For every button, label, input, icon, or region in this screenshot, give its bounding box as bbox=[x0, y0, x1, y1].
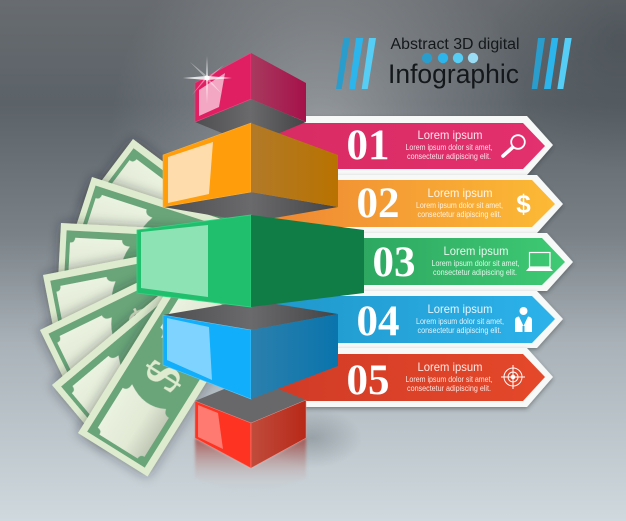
banknote 7 with dollar sign: $ bbox=[132, 350, 193, 400]
banner 1: Lorem ipsum bbox=[418, 128, 483, 142]
banknote 5 bbox=[40, 245, 251, 404]
banknote 6: $ bbox=[123, 327, 178, 385]
banner 3: Lorem ipsum dolor sit amet, bbox=[432, 259, 520, 268]
banner 3: 03 bbox=[372, 239, 416, 286]
blue box bbox=[163, 300, 338, 399]
banner 5: Lorem ipsum dolor sit amet, bbox=[406, 375, 492, 384]
banner 2: Lorem ipsum dolor sit amet, bbox=[416, 201, 503, 210]
title block bbox=[336, 36, 572, 89]
banknote 4 bbox=[43, 238, 250, 355]
pink box bbox=[195, 53, 306, 145]
sparkle bbox=[183, 56, 232, 104]
banner 5: 05 bbox=[346, 357, 390, 404]
banner 3: Lorem ipsum bbox=[444, 244, 509, 258]
banknote 3 bbox=[57, 223, 256, 315]
banner 4: 04 bbox=[356, 298, 400, 345]
banknote 1 bbox=[84, 139, 289, 322]
box reflection on the floor bbox=[195, 438, 306, 496]
banknote 5: $ bbox=[119, 295, 166, 356]
dots bbox=[422, 53, 478, 63]
fan of dollar banknotes bbox=[40, 139, 289, 476]
banner 2: 02 bbox=[356, 180, 400, 227]
icon: magnifier bbox=[503, 135, 525, 156]
banknote 2 bbox=[67, 177, 277, 315]
banner 4: Lorem ipsum dolor sit amet, bbox=[416, 317, 504, 326]
banner 3: consectetur adipiscing elit. bbox=[433, 268, 517, 277]
banknote 6 bbox=[52, 260, 254, 448]
banner 5: Lorem ipsum bbox=[418, 360, 483, 374]
banner 4: Lorem ipsum bbox=[428, 302, 493, 316]
green box bbox=[137, 215, 364, 307]
icon: laptop bbox=[526, 252, 553, 271]
orange box bbox=[163, 123, 338, 222]
banner 5 bbox=[250, 348, 553, 407]
banner 4: consectetur adipiscing elit. bbox=[418, 326, 502, 335]
banner 1: consectetur adipiscing elit. bbox=[407, 152, 491, 161]
banner 1: Lorem ipsum dolor sit amet, bbox=[406, 143, 492, 152]
banner 2: Lorem ipsum bbox=[428, 186, 493, 200]
banner 4 bbox=[250, 291, 563, 348]
red box bbox=[195, 378, 306, 468]
banner 2 bbox=[250, 175, 563, 233]
banner 5: consectetur adipiscing elit. bbox=[407, 384, 491, 393]
banknote 7 with dollar sign bbox=[78, 268, 251, 476]
right stripes bbox=[532, 38, 572, 89]
icon: businessman bbox=[515, 307, 532, 332]
banner 1 bbox=[250, 116, 553, 175]
title line 1: Abstract 3D digital bbox=[390, 36, 520, 53]
banner 3 bbox=[340, 233, 573, 291]
icon: target bbox=[501, 365, 525, 389]
left stripes bbox=[336, 38, 376, 89]
title line 2: Infographic bbox=[388, 59, 519, 89]
icon: dollar: $ bbox=[516, 189, 531, 219]
banner 2: consectetur adipiscing elit. bbox=[418, 210, 502, 219]
banner 1: 01 bbox=[346, 122, 390, 169]
